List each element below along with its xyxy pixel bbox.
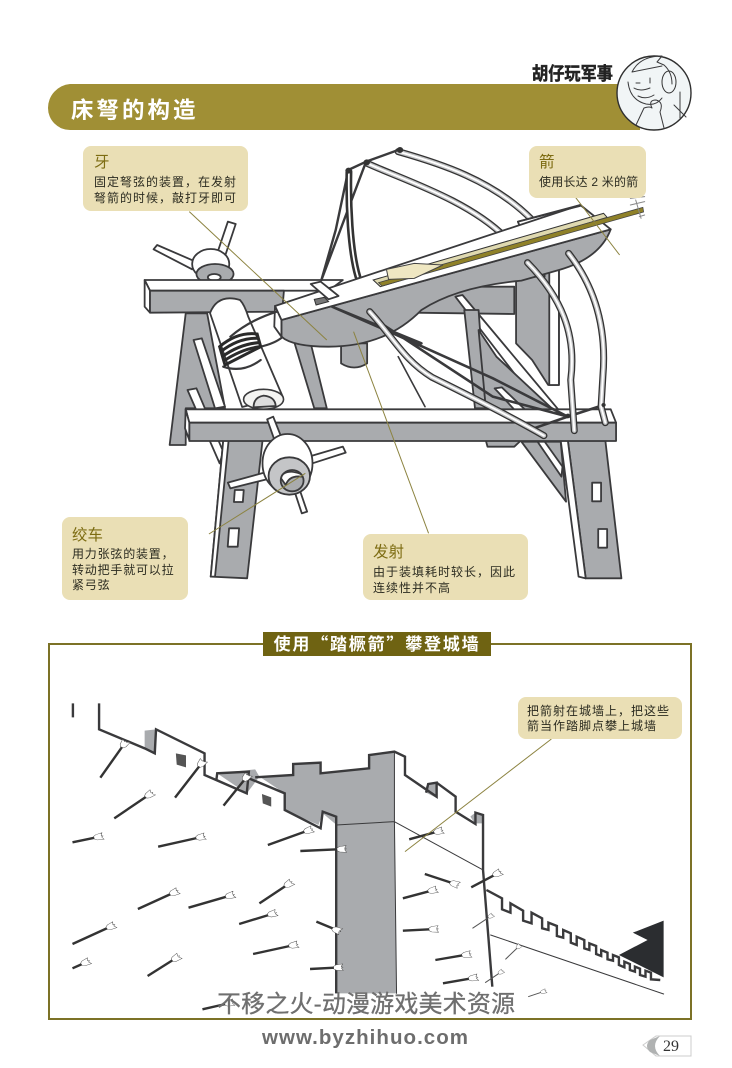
front winch handle xyxy=(228,417,346,513)
callout: firing: 由于装填耗时较长，因此 xyxy=(373,564,516,579)
callout: firing xyxy=(363,534,528,600)
callout: winch xyxy=(62,517,188,600)
front bows and strings xyxy=(332,253,606,436)
back winch handle xyxy=(154,222,236,284)
callout: ya: 固定弩弦的装置，在发射 xyxy=(94,174,237,189)
callout: arrow: 使用长达 2 米的箭 xyxy=(539,174,638,189)
callout: firing: 发射 xyxy=(373,543,404,561)
callout: arrow: 箭 xyxy=(539,152,555,171)
callout: winch: 紧弓弦 xyxy=(72,577,110,592)
callout: ya: 牙 xyxy=(94,154,110,171)
arrow shaft xyxy=(379,207,644,286)
watermark text: 不移之火-动漫游戏美术资源 xyxy=(217,991,515,1018)
page number: 29 xyxy=(663,1038,679,1055)
series logo text: 胡仔玩军事 xyxy=(532,64,613,84)
callout: ya xyxy=(83,146,248,211)
callout: firing: 连续性并不高 xyxy=(373,580,451,595)
watermark url: www.byzhihuo.com xyxy=(261,1026,468,1049)
crossbow illustration xyxy=(145,147,645,578)
crossbow stock xyxy=(274,197,645,347)
tower thin lines xyxy=(336,752,664,994)
climbing arrows xyxy=(72,747,541,1009)
callout: winch: 绞车 xyxy=(72,526,103,544)
stock strap xyxy=(311,282,339,299)
header banner xyxy=(48,84,640,130)
back rail xyxy=(145,280,514,314)
panel: climbing the wall xyxy=(49,644,691,1019)
callout: climbing xyxy=(518,697,682,739)
back bows and strings xyxy=(321,147,589,280)
back left leg xyxy=(170,313,225,463)
front rail xyxy=(185,409,616,441)
back right post xyxy=(516,243,559,385)
braces under stock xyxy=(295,295,566,502)
crossbow pivot xyxy=(341,343,367,367)
distant crenellated wall xyxy=(486,890,660,980)
distant dark tower xyxy=(619,921,664,977)
page number tab xyxy=(643,1036,691,1056)
title: 床弩的构造 xyxy=(71,97,199,123)
mascot icon xyxy=(617,56,691,130)
callout: winch: 用力张弦的装置， xyxy=(72,546,174,561)
wall outlines xyxy=(73,703,492,993)
panel heading: 使用“踏橛箭”攀登城墙 xyxy=(274,630,480,655)
front left leg xyxy=(211,441,262,578)
callout: arrow xyxy=(529,146,646,198)
front right leg xyxy=(561,441,621,578)
callout: climbing: 把箭射在城墙上，把这些 xyxy=(527,703,670,718)
callout: ya: 弩箭的时候，敲打牙即可 xyxy=(94,190,237,205)
leader lines xyxy=(189,197,620,534)
city wall illustration xyxy=(72,703,664,1009)
windlass drum xyxy=(210,298,284,409)
callout: winch: 转动把手就可以拉 xyxy=(72,562,174,577)
arrow fletching xyxy=(386,263,443,279)
leader line xyxy=(405,739,551,852)
callout: climbing: 箭当作踏脚点攀上城墙 xyxy=(527,718,657,733)
tower grey faces xyxy=(145,729,482,993)
